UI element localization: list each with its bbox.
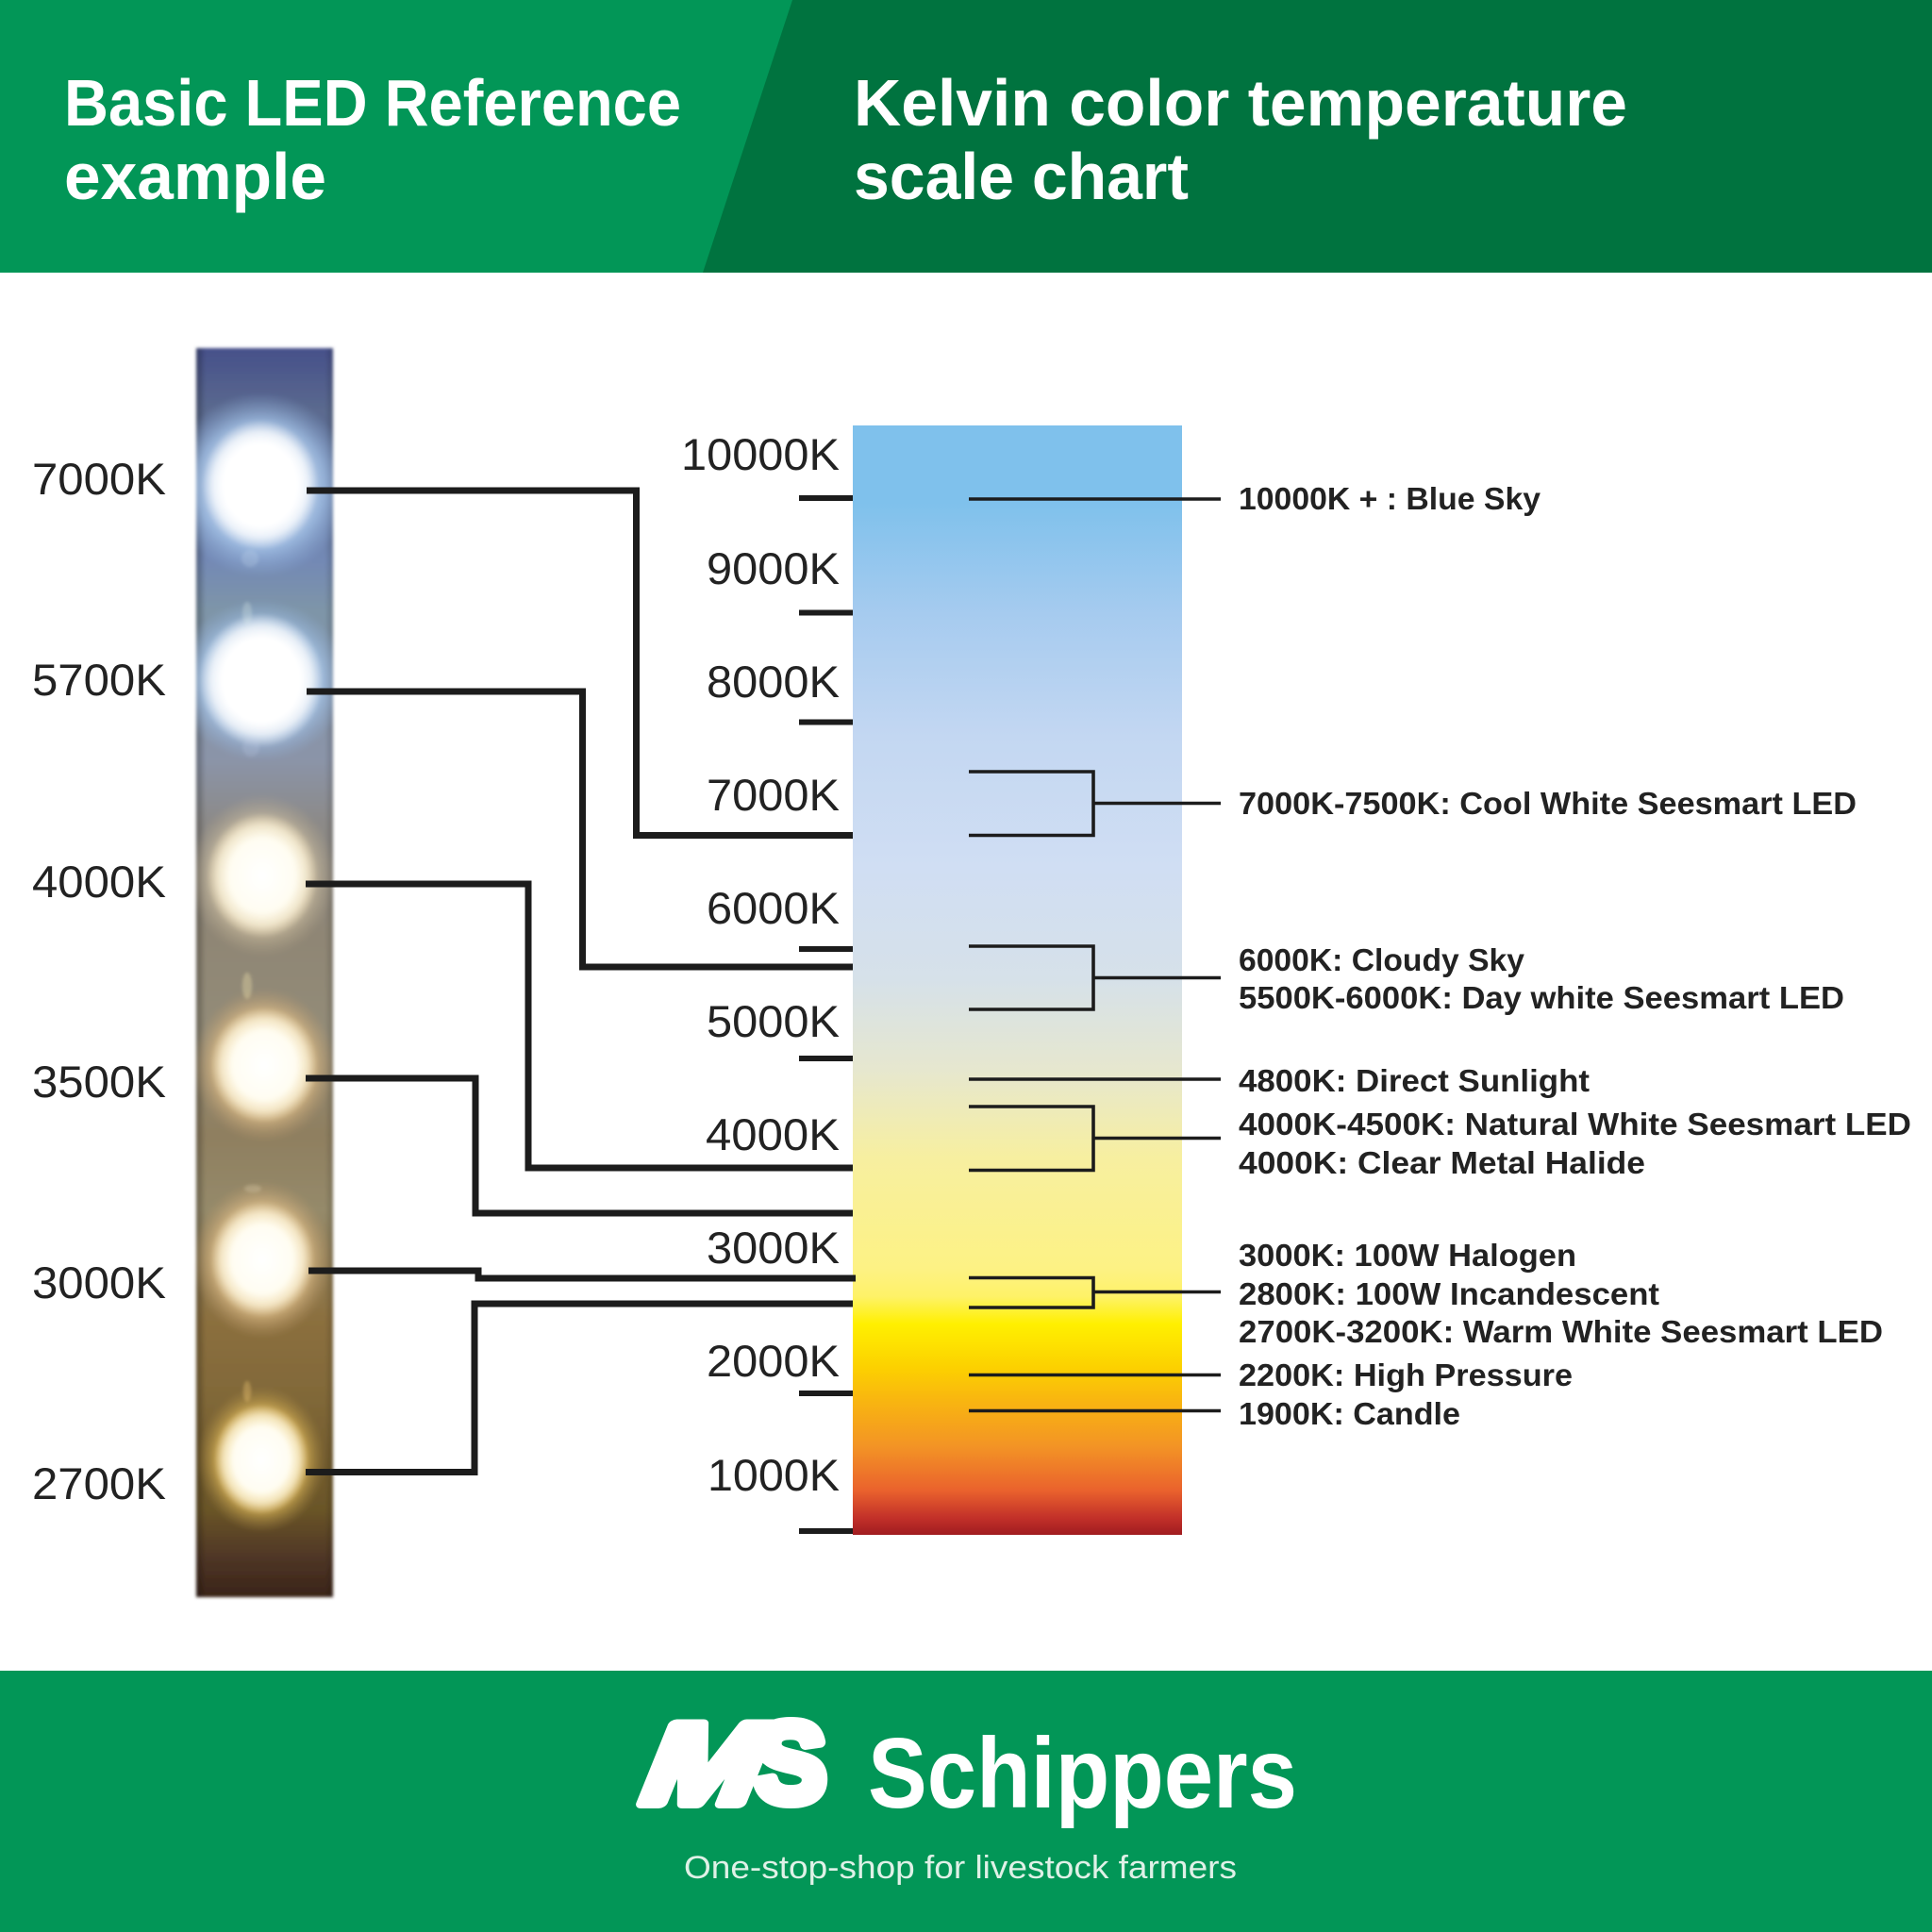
LED strip temperature labels: 3000K xyxy=(32,1257,166,1307)
logo wordmark: Schippers: Schippers xyxy=(868,1718,1297,1829)
heading: Kelvin color temperature scale chart: Kelvin color temperature xyxy=(854,66,1627,140)
reference labels: 2700K-3200K: Warm White Seesmart LED xyxy=(1239,1314,1883,1349)
scale labels: 2000K xyxy=(707,1336,840,1386)
reference labels: 4800K: Direct Sunlight xyxy=(1239,1063,1590,1098)
LED strip photo xyxy=(193,345,336,1600)
LED strip temperature labels: 7000K xyxy=(32,454,166,504)
LED strip temperature labels: 5700K xyxy=(32,655,166,705)
scale labels: 8000K xyxy=(707,657,840,707)
reference callout lines xyxy=(969,499,1221,1411)
scale labels: 5000K xyxy=(707,996,840,1046)
heading: Kelvin color temperature scale chart xyxy=(854,66,1627,213)
reference labels: 2800K: 100W Incandescent xyxy=(1239,1276,1659,1311)
scale labels: 3000K xyxy=(707,1223,840,1273)
LED strip temperature labels xyxy=(32,454,166,1508)
scale labels: 6000K xyxy=(707,883,840,933)
scale labels xyxy=(681,429,840,1500)
LED strip temperature labels: 2700K xyxy=(32,1458,166,1508)
reference labels: 4000K: Clear Metal Halide xyxy=(1239,1145,1645,1180)
reference labels: 10000K + : Blue Sky xyxy=(1239,481,1541,516)
tagline: One-stop-shop for livestock farmers xyxy=(684,1850,1237,1886)
scale labels: 7000K xyxy=(707,770,840,820)
reference labels: 4000K-4500K: Natural White Seesmart LED xyxy=(1239,1107,1911,1141)
reference labels: 7000K-7500K: Cool White Seesmart LED xyxy=(1239,786,1857,821)
color temperature gradient bar xyxy=(853,425,1182,1535)
heading: Kelvin color temperature scale chart: scale chart xyxy=(854,140,1189,213)
heading: Basic LED Reference example: example xyxy=(64,140,326,213)
scale labels: 10000K xyxy=(681,429,840,479)
LED strip temperature labels: 4000K xyxy=(32,857,166,907)
scale labels: 4000K xyxy=(706,1109,840,1159)
logo mark: MS: M xyxy=(625,1701,791,1827)
scale labels: 9000K xyxy=(707,543,840,593)
scale tick marks xyxy=(799,495,853,1534)
logo mark: MS: S xyxy=(755,1700,826,1826)
reference labels: 2200K: High Pressure xyxy=(1239,1357,1573,1392)
LED strip temperature labels: 3500K xyxy=(32,1057,166,1107)
reference labels: 1900K: Candle xyxy=(1239,1396,1460,1431)
connector lines from LEDs to scale xyxy=(306,491,856,1472)
footer band xyxy=(0,1671,1932,1932)
reference labels xyxy=(1239,481,1911,1431)
reference labels: 6000K: Cloudy Sky xyxy=(1239,942,1525,977)
reference labels: 5500K-6000K: Day white Seesmart LED xyxy=(1239,980,1844,1015)
heading: Basic LED Reference example xyxy=(64,66,681,213)
scale labels: 1000K xyxy=(708,1450,840,1500)
reference labels: 3000K: 100W Halogen xyxy=(1239,1238,1576,1273)
header band xyxy=(0,0,1932,273)
heading: Basic LED Reference example: Basic LED Reference xyxy=(64,66,681,140)
